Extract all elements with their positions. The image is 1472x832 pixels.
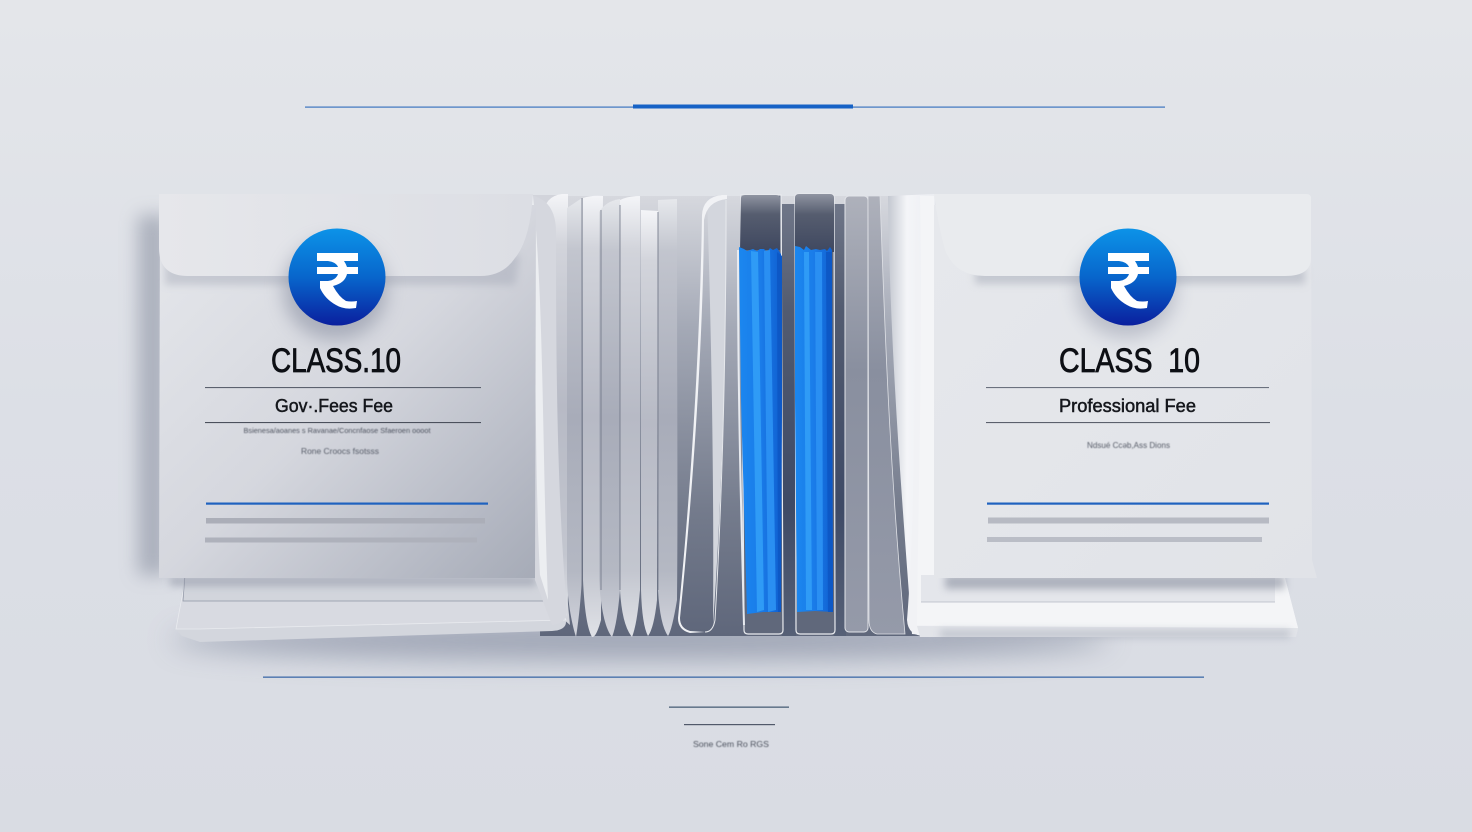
panel: left card (159, 194, 536, 578)
coin shadow (283, 240, 387, 340)
flap shadow (975, 268, 1305, 284)
coin shadow (1076, 242, 1176, 338)
fine print: Bsienesa/aoanes s Ravanae/Concnfaose Sfaeroen oooot (244, 426, 431, 435)
dark gaps between folders (782, 204, 846, 636)
placeholder lines (987, 518, 1269, 542)
sub-heading rules (986, 387, 1270, 423)
icon: rupee coin (1080, 228, 1176, 326)
envelope flap (159, 194, 533, 276)
white paper strips (533, 194, 677, 637)
blue accent line (987, 502, 1269, 505)
card body (934, 205, 1317, 578)
tilted open folder (678, 195, 727, 633)
sub-heading: govt fee: Gov·.Fees Fee (275, 396, 393, 416)
card shadow (945, 575, 1285, 589)
sub-heading: professional fee: Professional Fee (1059, 396, 1196, 416)
heading: class 10: CLASS.10 (271, 342, 401, 380)
flap shadow (165, 255, 520, 285)
right paper stack (907, 196, 1298, 638)
central file stack (533, 194, 935, 637)
placeholder lines (205, 518, 485, 542)
panel: right card (934, 194, 1317, 589)
curved white sheets (888, 194, 935, 636)
heading: class 10: CLASS 10 (1059, 342, 1200, 380)
fine print (244, 426, 431, 456)
card body (159, 205, 536, 578)
blue folder left (737, 195, 783, 634)
sub-heading rules (205, 387, 481, 423)
envelope flap (934, 194, 1311, 276)
blue accent line (206, 502, 488, 505)
left paper stack (170, 195, 567, 642)
blue sheets (795, 246, 833, 612)
bottom blue rule (263, 676, 1204, 678)
blue folder right (795, 194, 835, 634)
top divider rule (305, 104, 1165, 108)
blue sheets (739, 247, 782, 614)
footer short rules (669, 706, 789, 725)
icon: rupee coin (288, 228, 386, 326)
stack backdrop (540, 196, 930, 636)
fine print: Ndsué Ccəb,Ass Dions (1087, 441, 1170, 450)
footer caption: Sone Cem Ro RGS (693, 740, 769, 749)
fine print: Rone Croocs fsotsss (301, 447, 379, 456)
gray folder strips (845, 196, 905, 634)
